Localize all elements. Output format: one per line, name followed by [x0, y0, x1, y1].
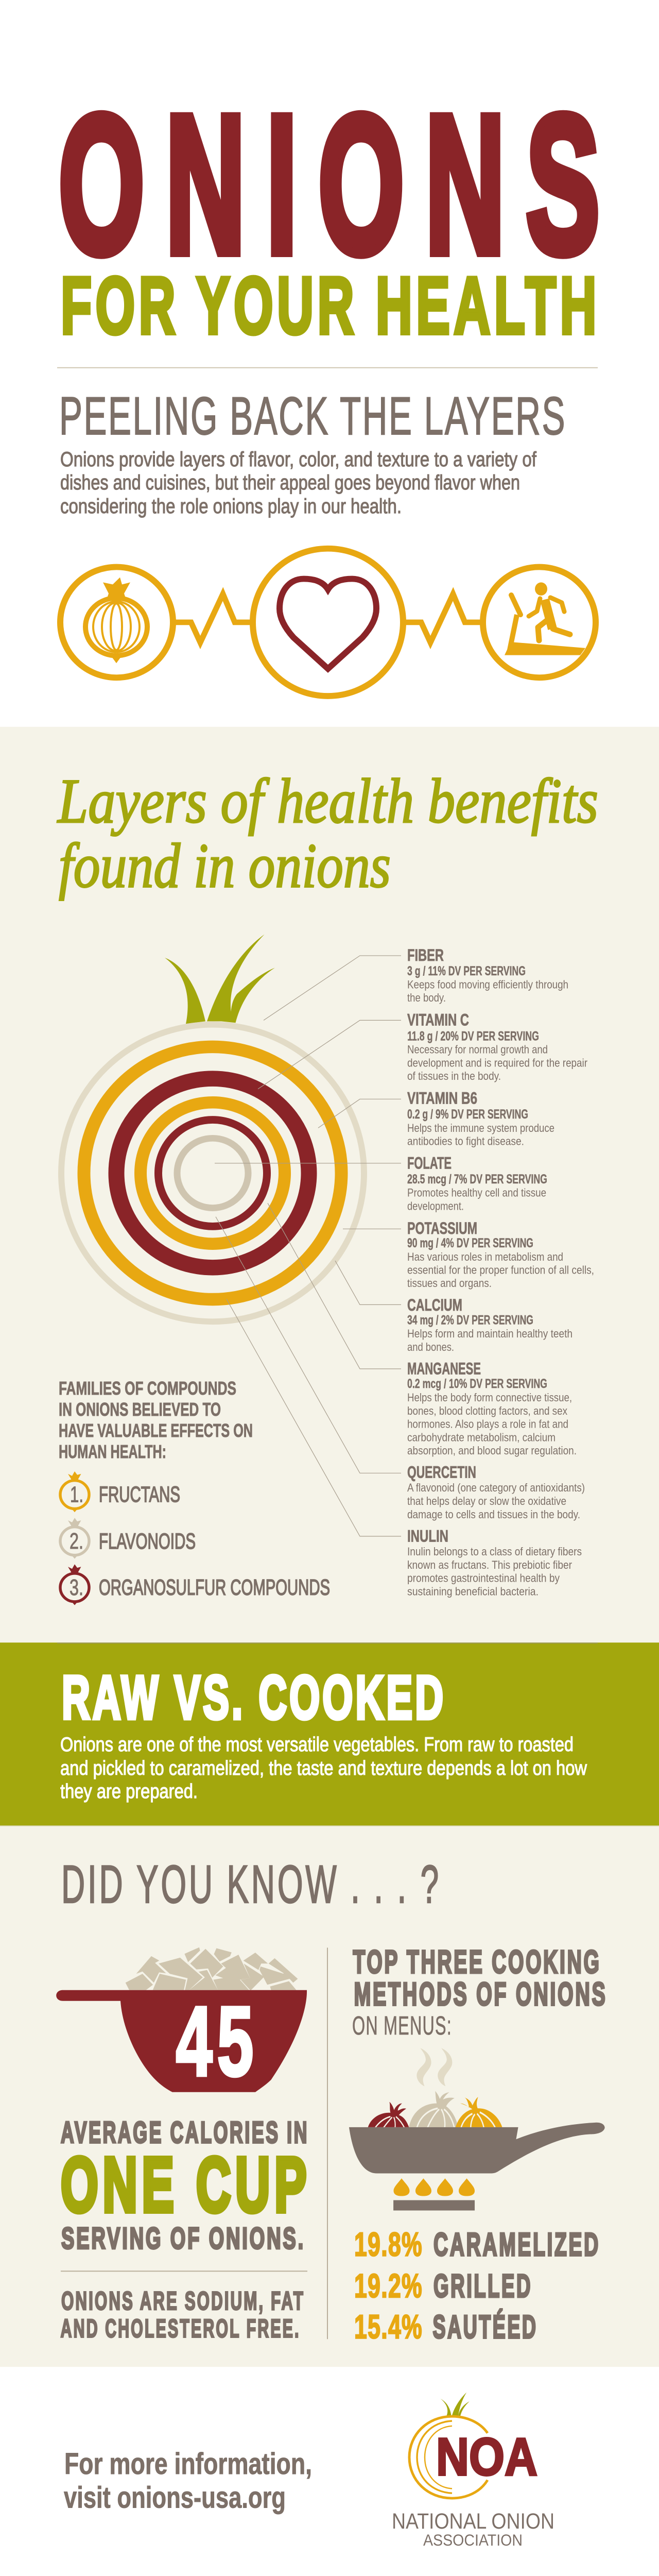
families of compounds heading: HAVE VALUABLE EFFECTS ON: [59, 1420, 253, 1441]
nutrient: vitamin b6: [407, 1089, 554, 1147]
nutrient: calcium: CALCIUM: [407, 1295, 462, 1314]
onion: orange: [456, 2097, 502, 2128]
nutrient: vitamin c: of tissues in the body.: [407, 1069, 501, 1082]
nutrient: vitamin b6: VITAMIN B6: [407, 1089, 477, 1108]
nutrient: inulin: promotes gastrointestinal health by: [407, 1571, 560, 1585]
nutrient: calcium: and bones.: [407, 1340, 454, 1353]
logo name: NATIONAL ONION: [392, 2509, 554, 2534]
nutrient: calcium: Helps form and maintain healthy teeth: [407, 1327, 573, 1340]
nutrient: folate: FOLATE: [407, 1154, 452, 1173]
nutrient: folate: 28.5 mcg / 7% DV PER SERVING: [407, 1173, 547, 1187]
icon: onion circle: [60, 567, 173, 677]
onion rings: [61, 1025, 364, 1321]
nutrient: quercetin: A flavonoid (one category of antioxidants): [407, 1481, 585, 1494]
logo name: ASSOCIATION: [423, 2531, 523, 2549]
nutrient: inulin: known as fructans. This prebiotic fiber: [407, 1558, 572, 1571]
illustration: bowl of chopped onions: [56, 1947, 307, 2097]
nutrient: manganese: absorption, and blood sugar regulation.: [407, 1444, 577, 1457]
text: sodium fat cholesterol free: [61, 2286, 305, 2343]
nutrient: inulin: sustaining beneficial bacteria.: [407, 1585, 539, 1598]
burner: [393, 2200, 475, 2211]
nutrient: vitamin c: 11.8 g / 20% DV PER SERVING: [407, 1030, 539, 1044]
calorie number: 45: [176, 1986, 258, 2097]
stat: sauteed: [354, 2308, 537, 2346]
panel: raw vs cooked: [0, 1642, 659, 1826]
logo wordmark NOA: NOA: [436, 2428, 537, 2487]
nutrient: vitamin c: VITAMIN C: [407, 1010, 469, 1029]
heartbeat icon row: [60, 549, 596, 696]
compound 1: fructans: [60, 1471, 180, 1512]
icon: logo onion rings: [409, 2416, 488, 2498]
nutrient: vitamin b6: antibodies to fight disease.: [407, 1134, 524, 1147]
nutrient: fiber: [407, 945, 568, 1004]
nutrient: calcium: [407, 1295, 573, 1353]
bowl: [56, 1990, 307, 2092]
nutrient: inulin: Inulin belongs to a class of dietary fibers: [407, 1545, 582, 1558]
nutrient: potassium: tissues and organs.: [407, 1276, 492, 1290]
icon: numbered onion 1: [60, 1471, 89, 1512]
script heading: layers of health benefits: found in onions: [59, 831, 391, 901]
nutrient: fiber: 3 g / 11% DV PER SERVING: [407, 964, 526, 978]
nutrient: potassium: [407, 1218, 594, 1290]
text: average calories in one cup: AVERAGE CALORIES IN: [61, 2115, 309, 2149]
raw vs cooked paragraph: [60, 1733, 587, 1803]
icon: numbered onion 2: [60, 1518, 89, 1558]
families of compounds heading: HUMAN HEALTH:: [59, 1441, 166, 1462]
icon: numbered onion 3: 3.: [70, 1575, 83, 1600]
callout leader lines: [215, 956, 401, 1536]
stat: grilled: GRILLED: [433, 2268, 532, 2304]
nutrient: folate: development.: [407, 1199, 464, 1212]
nutrient: manganese: carbohydrate metabolism, calcium: [407, 1431, 556, 1444]
heading: top three cooking methods: [352, 1944, 608, 2040]
nutrient: quercetin: damage to cells and tissues in the body.: [407, 1507, 580, 1521]
families of compounds heading: FAMILIES OF COMPOUNDS: [59, 1378, 236, 1399]
footer: more information: [64, 2446, 312, 2515]
intro paragraph: considering the role onions play in our health.: [60, 494, 402, 518]
logo name: [392, 2509, 554, 2549]
compound 2: flavonoids: [60, 1518, 196, 1558]
icon: heartbeat line: [176, 594, 480, 642]
label: ORGANOSULFUR COMPOUNDS: [99, 1575, 330, 1600]
nutrient: potassium: essential for the proper function of all cells,: [407, 1263, 594, 1276]
onion: beige: [409, 2091, 458, 2128]
nutrient: manganese: MANGANESE: [407, 1359, 481, 1378]
footer: more information: For more information,: [64, 2446, 312, 2481]
icon: onion leaves: [165, 935, 275, 1024]
nutrient: manganese: hormones. Also plays a role in fat and: [407, 1417, 568, 1431]
icon: numbered onion 3: [60, 1564, 89, 1605]
heading: top three cooking methods: ON MENUS:: [352, 2010, 452, 2040]
intro paragraph: Onions provide layers of flavor, color, and texture to a variety of: [60, 447, 537, 471]
nutrient: folate: Promotes healthy cell and tissue: [407, 1186, 546, 1199]
nutrient: potassium: POTASSIUM: [407, 1218, 477, 1238]
script heading: layers of health benefits: [57, 766, 598, 901]
stat: grilled: [354, 2267, 532, 2304]
compound 3: organosulfur compounds: [60, 1564, 330, 1605]
nutrient: quercetin: QUERCETIN: [407, 1463, 476, 1482]
onion: red: [368, 2102, 409, 2128]
stat: sauteed: 15.4%: [354, 2308, 423, 2346]
text: sodium fat cholesterol free: ONIONS ARE SODIUM, FAT: [61, 2286, 305, 2315]
nutrient: inulin: INULIN: [407, 1527, 448, 1546]
stat: caramelized: 19.8%: [354, 2226, 423, 2263]
logo: national onion association: [392, 2393, 554, 2549]
stat: grilled: 19.2%: [354, 2267, 423, 2304]
icon: treadmill circle: [483, 567, 596, 677]
intro paragraph: dishes and cuisines, but their appeal goes beyond flavor when: [60, 470, 520, 494]
label: FRUCTANS: [99, 1483, 180, 1507]
panel: layers of health benefits background: [0, 727, 659, 2367]
text: average calories in one cup: SERVING OF ONIONS.: [61, 2221, 305, 2256]
nutrient: potassium: Has various roles in metabolism and: [407, 1250, 563, 1263]
icon: logo leaves: [441, 2393, 470, 2416]
intro paragraph: [60, 447, 537, 518]
nutrient: folate: [407, 1154, 547, 1212]
nutrient: calcium: 34 mg / 2% DV PER SERVING: [407, 1314, 533, 1328]
onion cross-section diagram: [61, 935, 364, 1321]
nutrient: quercetin: [407, 1463, 585, 1521]
icon: numbered onion 2: 2.: [70, 1529, 83, 1554]
icon: heart circle: [253, 549, 403, 696]
chopped onion pile: [126, 1947, 298, 1990]
nutrient: manganese: Helps the body form connective tissue,: [407, 1391, 572, 1404]
cooking method stats: [354, 2226, 600, 2346]
illustration: onions in frying pan: [349, 2048, 605, 2211]
nutrient: vitamin c: development and is required for the repair: [407, 1056, 587, 1070]
stat: sauteed: SAUTÉED: [432, 2310, 538, 2345]
nutrient: quercetin: that helps delay or slow the oxidative: [407, 1494, 566, 1507]
nutrient: manganese: bones, blood clotting factors, and sex: [407, 1404, 568, 1417]
families of compounds heading: [59, 1378, 253, 1462]
nutrient: fiber: the body.: [407, 991, 446, 1004]
nutrient: vitamin b6: Helps the immune system produce: [407, 1121, 554, 1134]
text: average calories in one cup: [61, 2115, 311, 2256]
nutrient: manganese: [407, 1359, 577, 1457]
icon: numbered onion 1: 1.: [70, 1483, 83, 1507]
nutrient: fiber: FIBER: [407, 945, 444, 964]
text: sodium fat cholesterol free: AND CHOLESTEROL FREE.: [61, 2314, 300, 2343]
frying pan: [349, 2123, 605, 2174]
footer: more information: visit onions-usa.org: [64, 2480, 286, 2515]
flames: [393, 2178, 475, 2196]
raw vs cooked paragraph: they are prepared.: [60, 1781, 198, 1803]
nutrient: vitamin c: [407, 1010, 587, 1082]
nutrient: vitamin b6: 0.2 g / 9% DV PER SERVING: [407, 1108, 528, 1122]
steam: [417, 2048, 452, 2086]
nutrient: fiber: Keeps food moving efficiently through: [407, 978, 568, 991]
nutrient: vitamin c: Necessary for normal growth and: [407, 1043, 548, 1056]
label: FLAVONOIDS: [99, 1529, 196, 1554]
nutrient: manganese: 0.2 mcg / 10% DV PER SERVING: [407, 1377, 547, 1391]
text: average calories in one cup: ONE CUP: [61, 2142, 311, 2228]
nutrient: potassium: 90 mg / 4% DV PER SERVING: [407, 1236, 533, 1250]
families of compounds heading: IN ONIONS BELIEVED TO: [59, 1399, 221, 1420]
stat: caramelized: [354, 2226, 600, 2263]
nutrient: inulin: [407, 1527, 582, 1598]
